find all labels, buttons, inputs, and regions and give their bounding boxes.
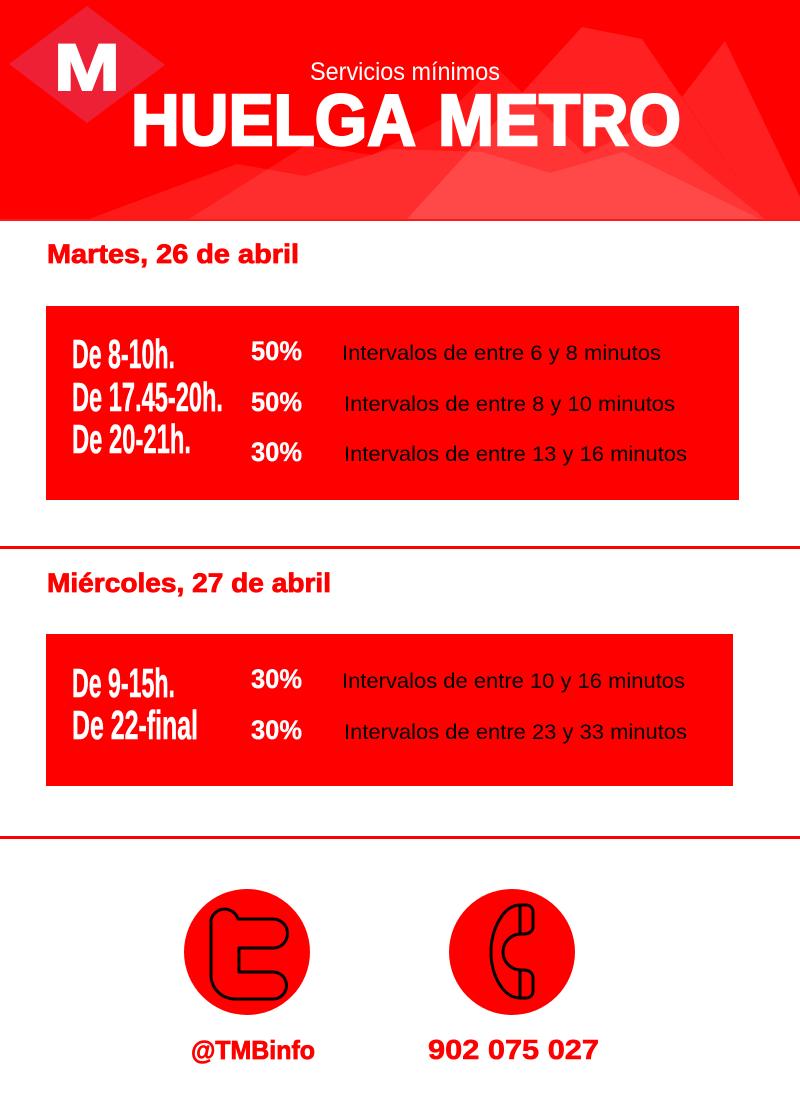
intervals: Intervalos de entre 13 y 16 minutos: [344, 443, 687, 466]
twitter handle: @TMBinfo: [191, 1035, 315, 1065]
percentages: 50%: [251, 336, 302, 366]
time ranges: De 8-10h.: [72, 331, 175, 377]
time ranges: De 20-21h.: [72, 416, 191, 462]
panel: martes schedule: [46, 306, 739, 500]
intervals: Intervalos de entre 8 y 10 minutos: [344, 393, 675, 416]
phone number: 902 075 027: [428, 1034, 599, 1065]
intervals: [342, 342, 687, 466]
time ranges: [72, 660, 198, 748]
percentages: 50%: [251, 387, 302, 417]
time ranges: De 22-final: [72, 702, 198, 748]
heading: miercoles: Miércoles, 27 de abril: [47, 568, 331, 598]
percentages: [251, 336, 302, 467]
title: HUELGA: [131, 81, 416, 161]
header banner: [0, 0, 800, 221]
intervals: Intervalos de entre 23 y 33 minutos: [344, 721, 687, 744]
heading: martes: Martes, 26 de abril: [47, 239, 299, 269]
title: [131, 81, 681, 161]
title: METRO: [438, 81, 681, 161]
intervals: Intervalos de entre 6 y 8 minutos: [342, 342, 661, 365]
time ranges: De 17.45-20h.: [72, 374, 223, 420]
intervals: Intervalos de entre 10 y 16 minutos: [342, 670, 685, 693]
percentages: 30%: [251, 715, 302, 745]
icon: twitter: [184, 889, 310, 1015]
metro logo: M: [54, 30, 120, 104]
percentages: 30%: [251, 437, 302, 467]
time ranges: De 9-15h.: [72, 660, 175, 706]
subtitle: Servicios mínimos: [310, 58, 500, 86]
percentages: 30%: [251, 664, 302, 694]
intervals: [342, 670, 687, 744]
panel: miercoles schedule: [46, 634, 733, 786]
percentages: [251, 664, 302, 745]
icon: phone: [449, 889, 575, 1015]
metro logo: [9, 6, 165, 123]
time ranges: [72, 331, 223, 462]
